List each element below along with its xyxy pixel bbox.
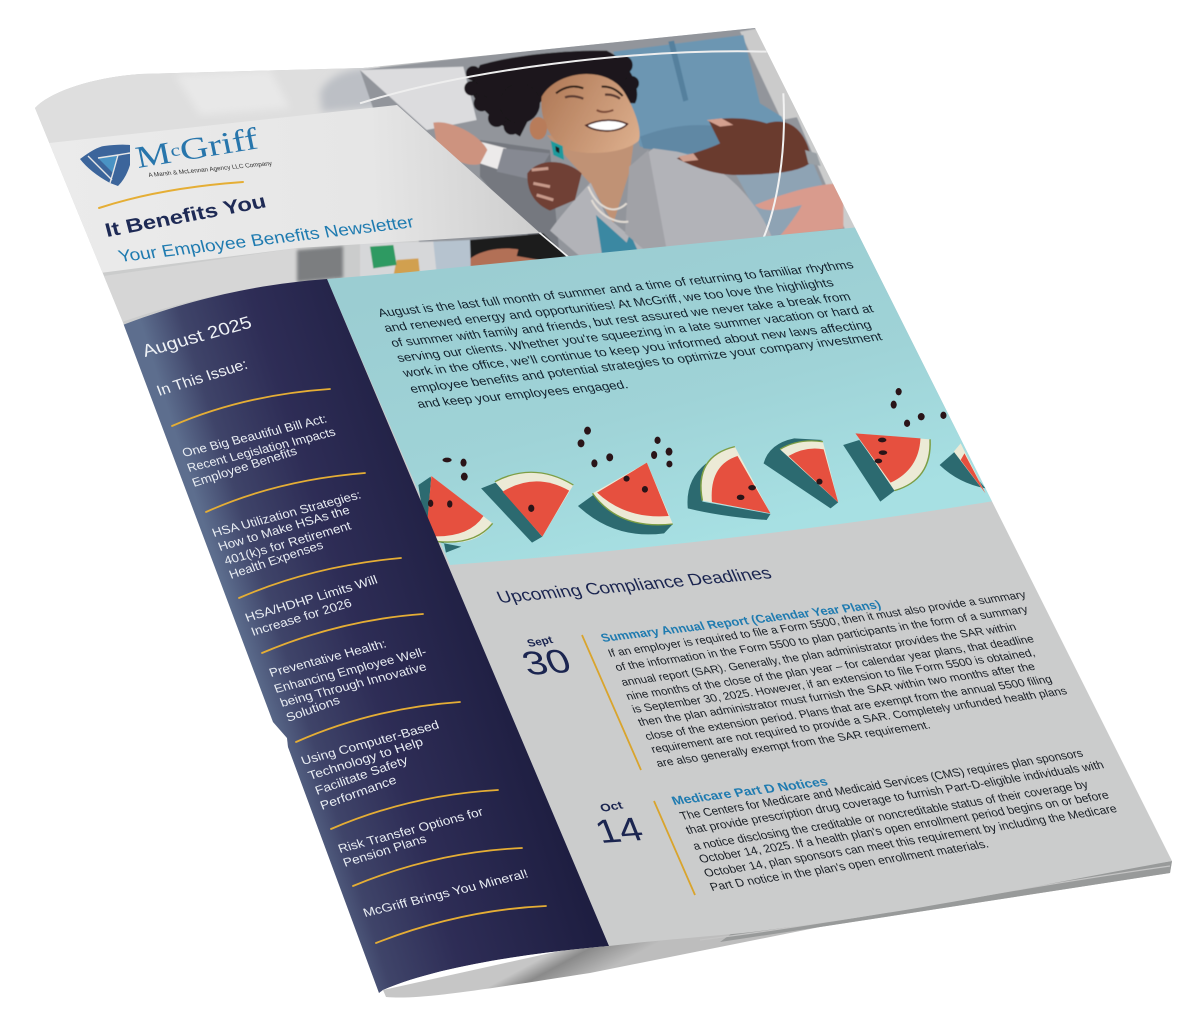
- sidebar in this issue: In This Issue:: [154, 356, 250, 400]
- intro paragraph: work in the office, we'll continue to keep you informed about new laws affecting: [399, 318, 874, 380]
- sidebar item: Preventative Health: Preventative Health:: [267, 637, 388, 680]
- sidebar item: HSA Utilization: [210, 488, 363, 582]
- deadline: Summary Annual Report: If an employer is required to file a Form 5500, then it must also provide a summary: [606, 589, 1028, 660]
- deadline: Medicare Part D Notices: Part D notice in the plan's open enrollment materials.: [708, 837, 991, 894]
- sidebar item: Computer-Based Technology: Facilitate Safety: [313, 753, 411, 798]
- sidebar item: Mineral: McGriff Brings You Mineral!: [361, 867, 530, 920]
- deadline: Summary Annual Report: close of the extension period. Plans that are exempt from the annual 5500 filing: [643, 674, 1054, 743]
- title: It Benefits You: [103, 190, 268, 242]
- hair: [464, 51, 639, 137]
- logo: A Marsh & McLennan Agency LLC Company: [147, 160, 274, 179]
- watermelon slices: [418, 388, 986, 553]
- sidebar date: August 2025: [139, 312, 254, 361]
- sidebar item: HSA Utilization: HSA Utilization Strategies:: [210, 488, 363, 540]
- date: Oct 14: 14: [590, 811, 649, 851]
- deadline: Summary Annual Report: [599, 589, 1069, 770]
- sidebar item: Preventative Health: [267, 637, 429, 725]
- paper stack underside: [383, 861, 1172, 998]
- icon: McGriff shield: [80, 145, 130, 186]
- deadline: Summary Annual Report: is September 30, 2025. However, if an extension to file Form 5500 is obtained,: [630, 648, 1037, 716]
- date: Sept 30: [517, 634, 577, 683]
- sidebar item: Preventative Health: Solutions: [284, 693, 342, 725]
- date: Sept 30: Sept: [525, 634, 555, 650]
- intro paragraph: employee benefits and potential strategies to optimize your company investment: [408, 330, 885, 396]
- deadline: Summary Annual Report: annual report (SAR). Generally, the plan administrator provides the SAR within: [619, 622, 1018, 689]
- lower blurred photo strip: [90, 246, 343, 322]
- sidebar item: Preventative Health: Enhancing Employee Well-: [272, 645, 428, 696]
- intro paragraph: and renewed energy and opportunities! At McGriff, we too love the highlights: [382, 276, 836, 335]
- deadline: Summary Annual Report: requirement are not required to provide a SAR. Completely unfunded health plans: [649, 686, 1069, 756]
- sidebar item: HSA Utilization: How to Make HSAs the: [216, 503, 352, 554]
- photo: smiling woman and clapping colleagues: [360, 23, 847, 283]
- deadline: Medicare Part D Notices: [669, 746, 1119, 894]
- sidebar item: HSA Utilization: 401(k)s for Retirement: [222, 519, 354, 568]
- deadline: Medicare Part D Notices: that provide prescription drug coverage to furnish Part-D-eligible individuals with: [684, 758, 1106, 837]
- sidebar item: HSA Utilization: Health Expenses: [227, 538, 325, 582]
- intro paragraph: and keep your employees engaged.: [415, 378, 630, 411]
- section heading: Upcoming Compliance Deadlines: [494, 563, 775, 607]
- sidebar item: Preventative Health: being Through Innovative: [278, 660, 429, 710]
- deadline: Summary Annual Report: are also generally exempt from the SAR requirement.: [654, 720, 932, 770]
- intro paragraph: August is the last full month of summer and a time of returning to familiar rhythms: [376, 258, 856, 320]
- logo: [80, 127, 272, 186]
- logo: c: [168, 140, 182, 160]
- subtitle: Your Employee Benefits Newsletter: [116, 212, 416, 266]
- top blurred photo strip: [36, 66, 380, 143]
- deadline: Summary Annual Report: then the plan administrator must furnish the SAR within two months after the: [636, 661, 1037, 729]
- sidebar item: Risk Transfer: Risk Transfer Options for: [336, 805, 485, 856]
- sidebar item: HSA HDHP limits: Increase for 2026: [249, 596, 354, 639]
- deadline: Summary Annual Report: Summary Annual Report (Calendar Year Plans): [599, 598, 883, 645]
- panel: teal intro: [327, 227, 1000, 565]
- header panel: [40, 105, 540, 274]
- sidebar item: One Big Beautiful Bill: Recent Legislation Impacts: [185, 425, 338, 475]
- panel: sidebar: [100, 279, 609, 1000]
- sidebar item: Risk Transfer: [336, 805, 485, 870]
- sidebar item: One Big Beautiful Bill: Employee Benefits: [190, 444, 299, 490]
- sidebar item: Computer-Based Technology: Using Computer-Based: [299, 718, 441, 768]
- deadline: Medicare Part D Notices: October 14, 2025. If a health plan's open enrollment period begins on or before: [697, 788, 1111, 866]
- gold title rule: [99, 182, 243, 208]
- sidebar item: Computer-Based Technology: [299, 718, 441, 813]
- sidebar item: One Big Beautiful Bill: [180, 412, 338, 490]
- gold divider: [582, 635, 641, 770]
- deadline: Medicare Part D Notices: a notice disclosing the creditable or noncreditable status of their coverage by: [691, 777, 1091, 853]
- date: Oct 14: [590, 800, 649, 851]
- deadline: Summary Annual Report: nine months of the close of the plan year – for calendar year plans, that deadline: [624, 634, 1036, 703]
- deadline: Medicare Part D Notices: October 14, plan sponsors can meet this requirement by including the Medicare: [702, 802, 1119, 880]
- date: Sept 30: 30: [517, 643, 577, 683]
- sidebar item: HSA HDHP limits: HSA/HDHP Limits Will: [243, 573, 379, 625]
- gold divider: [654, 801, 695, 895]
- intro paragraph: [376, 258, 885, 411]
- deadline: Medicare Part D Notices: Medicare Part D Notices: [669, 774, 830, 808]
- logo: M: [132, 136, 167, 175]
- date: Oct 14: Oct: [598, 800, 625, 815]
- logo: Griff: [177, 121, 262, 168]
- intro paragraph: serving our clients. Whether you're squeezing in a late summer vacation or hard at: [395, 302, 876, 365]
- sidebar item: HSA HDHP limits: [243, 573, 379, 639]
- sidebar item: Computer-Based Technology: Performance: [318, 773, 399, 813]
- deadline: Summary Annual Report: of the information in the Form 5500 to plan participants in the form of a summary: [613, 604, 1030, 674]
- intro paragraph: of summer with family and friends, but rest assured we never take a break from: [389, 290, 853, 350]
- sidebar item: One Big Beautiful Bill: One Big Beautiful Bill Act:: [180, 412, 329, 460]
- sidebar item: Risk Transfer: Pension Plans: [341, 832, 428, 870]
- deadline: Medicare Part D Notices: The Centers for Medicare and Medicaid Services (CMS) requires plan sponsors: [678, 746, 1085, 823]
- sidebar item: Computer-Based Technology: Technology to Help: [306, 735, 425, 783]
